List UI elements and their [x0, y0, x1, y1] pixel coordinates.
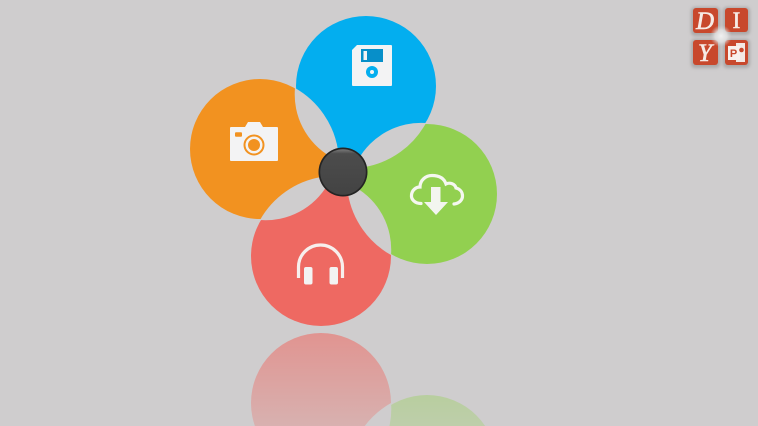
icon: camera	[230, 122, 278, 161]
logo icon: PowerPoint: P	[730, 48, 737, 60]
logo letter I: I	[733, 8, 740, 33]
icon: cloud download	[411, 176, 462, 215]
red petal with headphones	[251, 186, 391, 326]
blue petal with floppy disk	[296, 16, 436, 156]
logo: DIY PowerPoint tiles	[691, 7, 750, 68]
gaps between petals	[260, 88, 426, 255]
reflection of pinwheel	[251, 333, 485, 426]
center hub	[318, 148, 368, 196]
icon: headphones	[298, 245, 342, 284]
logo letter Y: Y	[698, 40, 715, 67]
orange petal with camera	[190, 79, 330, 219]
green petal with cloud download	[357, 124, 497, 264]
icon: floppy disk	[352, 45, 392, 86]
logo letter D: D	[695, 8, 714, 35]
